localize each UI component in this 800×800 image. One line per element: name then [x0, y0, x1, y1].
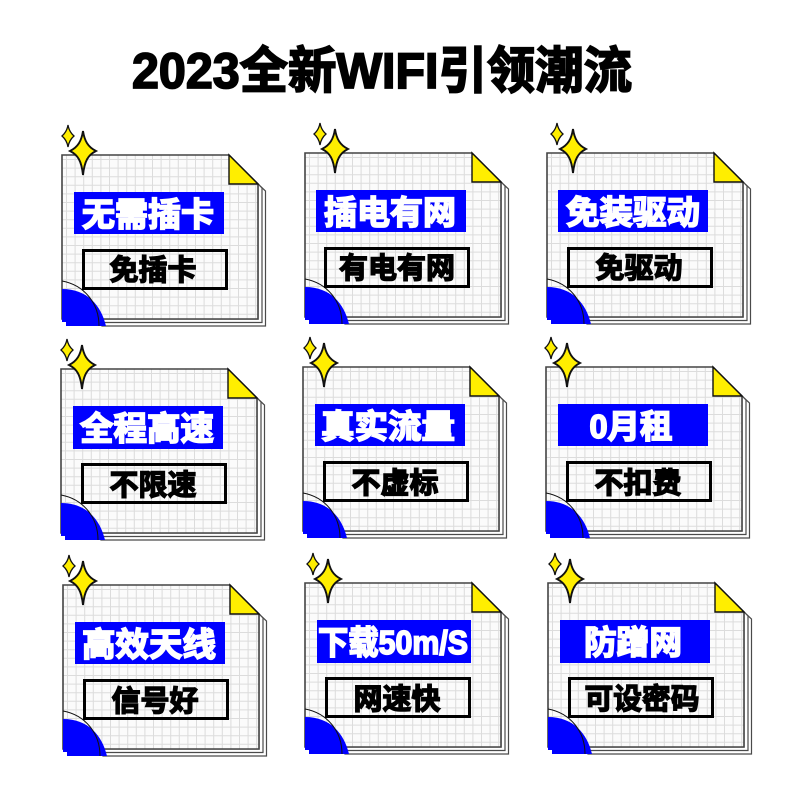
- panel: 无需插卡: [62, 125, 266, 326]
- panel: 防蹭网: 可设密码: [584, 683, 700, 716]
- panel: 真实流量: 不虚标: [352, 467, 438, 500]
- panel: 无需插卡: 免插卡: [110, 254, 196, 287]
- panel: 高效天线: [63, 555, 266, 756]
- panel: 下载50m/S: 网速快: [354, 683, 440, 716]
- panel: 免装驱动: 免装驱动: [566, 194, 700, 231]
- panel: 全程高速: 不限速: [110, 469, 196, 502]
- panel: 防蹭网: [548, 553, 752, 754]
- panel: 0月租: 不扣费: [594, 467, 682, 500]
- panel: 免装驱动: 免驱动: [596, 252, 682, 285]
- panel: 插电有网: 有电有网: [339, 252, 455, 285]
- panel: 无需插卡: 无需插卡: [82, 196, 214, 233]
- panel: 插电有网: [305, 123, 508, 324]
- panel: 下载50m/S: [305, 553, 508, 754]
- panel: 真实流量: [303, 337, 506, 538]
- panel: 插电有网: 插电有网: [324, 194, 456, 231]
- panel: 下载50m/S: 下载50m/S: [318, 624, 468, 661]
- panel: 真实流量: 真实流量: [321, 408, 455, 445]
- panel: 防蹭网: 防蹭网: [584, 624, 682, 661]
- title: 2023全新WIFI引领潮流: [132, 43, 632, 99]
- panel: 0月租: 0月租: [590, 408, 672, 445]
- panel: 0月租: [545, 337, 750, 538]
- panel: 免装驱动: [547, 123, 750, 324]
- panel: 高效天线: 信号好: [112, 685, 198, 718]
- panel: 全程高速: 全程高速: [80, 410, 214, 447]
- panel: 高效天线: 高效天线: [82, 626, 216, 663]
- panel: 全程高速: [61, 339, 264, 540]
